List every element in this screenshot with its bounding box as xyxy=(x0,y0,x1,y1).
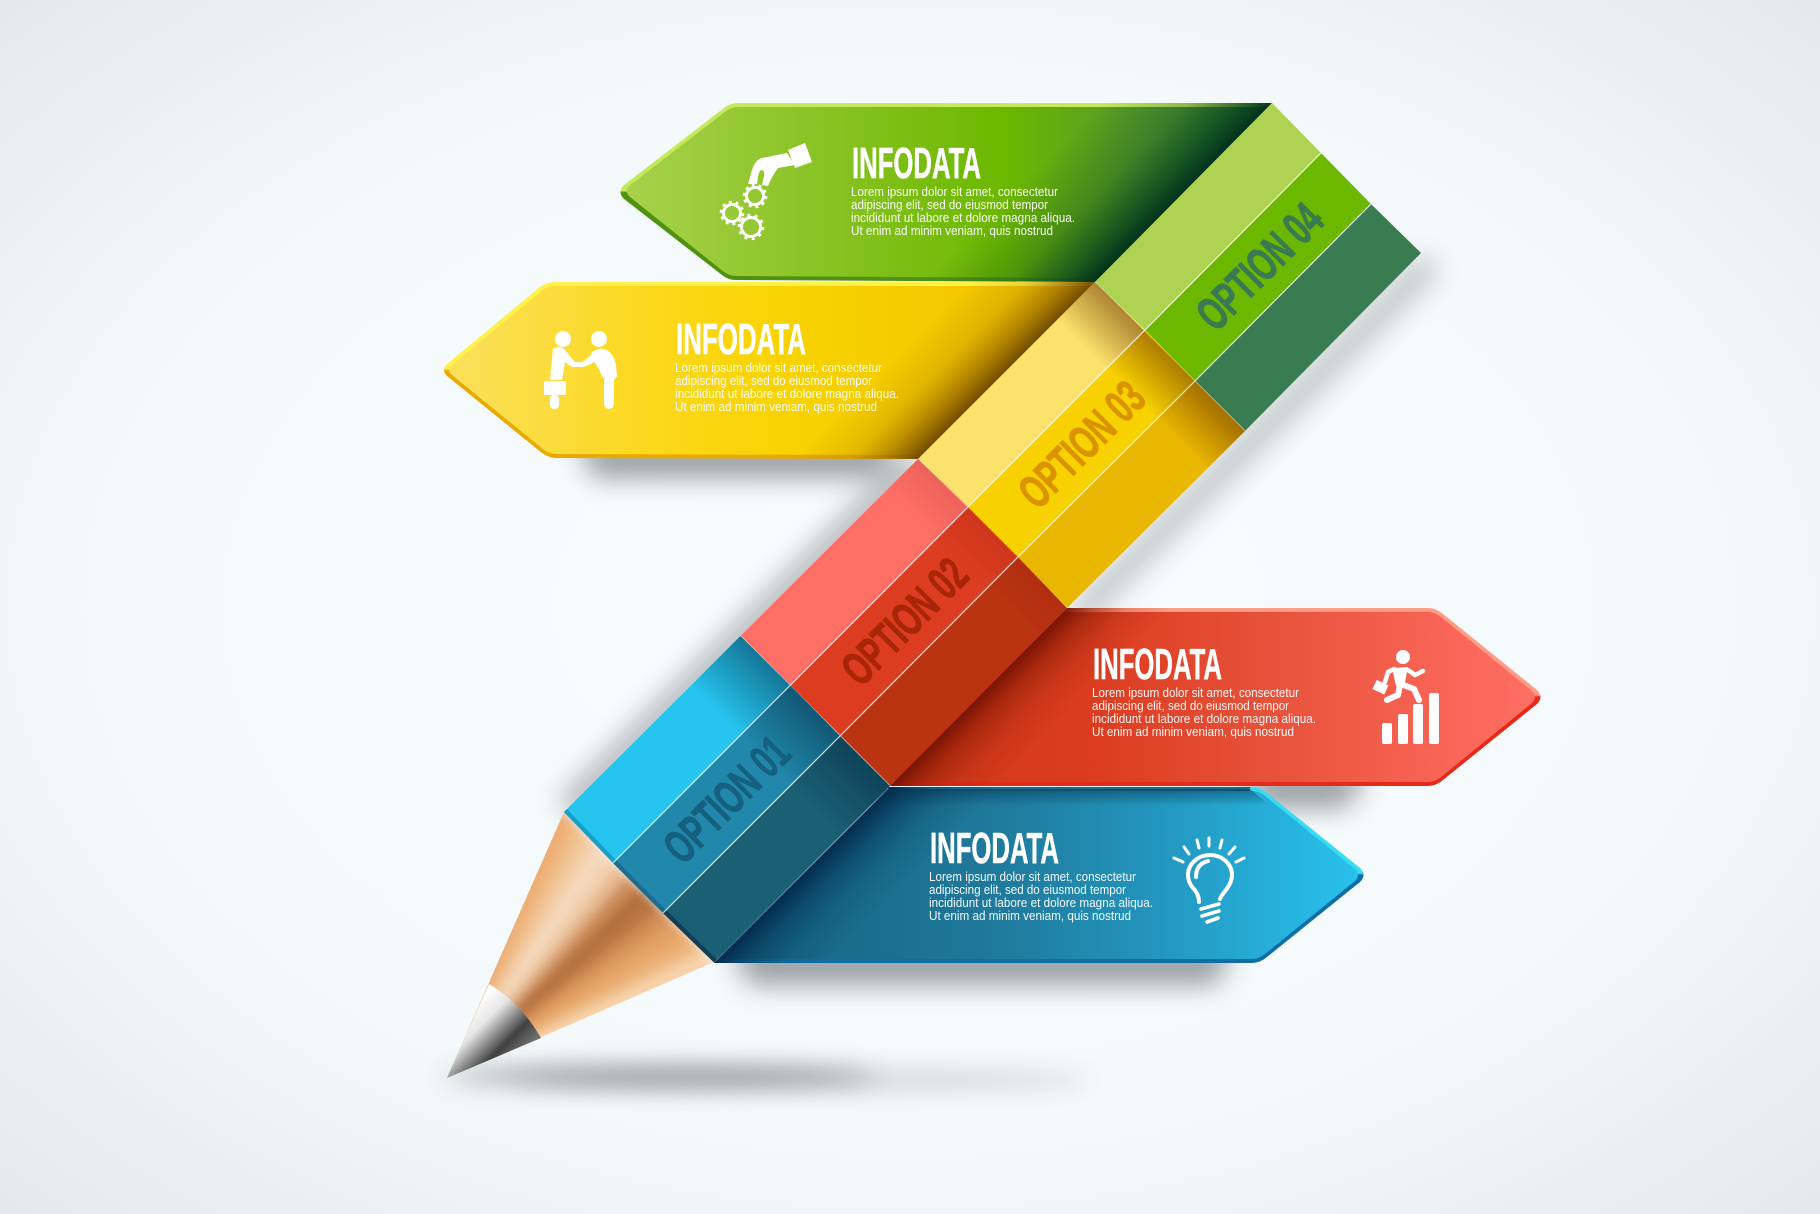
pencil body: option 04 segment xyxy=(1095,103,1421,431)
pencil body: option 02 segment xyxy=(740,459,1067,786)
heading: infodata green: INFODATA xyxy=(852,139,981,188)
text block: red description: Lorem ipsum dolor sit amet, consectetur xyxy=(1092,686,1299,700)
icon: runner on bars xyxy=(1372,650,1439,744)
pencil body: option 03 segment xyxy=(918,282,1245,608)
heading: infodata blue: INFODATA xyxy=(930,824,1059,873)
label: option 04: OPTION 04 xyxy=(1185,192,1333,340)
text block: red description: incididunt ut labore et dolore magna aliqua. xyxy=(1092,712,1316,726)
text block: green description: incididunt ut labore et dolore magna aliqua. xyxy=(851,211,1075,225)
text block: yellow description xyxy=(675,361,899,414)
text block: yellow description: adipiscing elit, sed do eiusmod tempor xyxy=(675,374,872,388)
icon: hand with gears xyxy=(721,143,812,239)
text block: green description: adipiscing elit, sed do eiusmod tempor xyxy=(851,198,1048,212)
heading: infodata yellow: INFODATA xyxy=(676,315,806,364)
text block: red description: Ut enim ad minim veniam, quis nostrud xyxy=(1092,725,1294,739)
text block: yellow description: Ut enim ad minim veniam, quis nostrud xyxy=(675,400,877,414)
text block: blue description: incididunt ut labore et dolore magna aliqua. xyxy=(929,896,1153,910)
pencil wood xyxy=(448,812,714,1076)
text block: yellow description: incididunt ut labore et dolore magna aliqua. xyxy=(675,387,899,401)
text block: red description xyxy=(1092,686,1316,739)
icon: handshake xyxy=(544,331,617,409)
label: option 01: OPTION 01 xyxy=(652,725,800,873)
text block: green description: Lorem ipsum dolor sit amet, consectetur xyxy=(851,185,1058,199)
text block: green description: Ut enim ad minim veniam, quis nostrud xyxy=(851,224,1053,238)
text block: blue description: Lorem ipsum dolor sit amet, consectetur xyxy=(929,870,1136,884)
drop shadows xyxy=(445,253,1440,1090)
icon: light bulb xyxy=(1174,838,1244,922)
text block: green description xyxy=(851,185,1075,238)
label: option 03: OPTION 03 xyxy=(1007,370,1155,518)
pencil lead xyxy=(447,984,541,1078)
pencil body: option 01 segment xyxy=(564,636,890,962)
text block: yellow description: Lorem ipsum dolor sit amet, consectetur xyxy=(675,361,882,375)
text block: red description: adipiscing elit, sed do eiusmod tempor xyxy=(1092,699,1289,713)
panel: option 04 info arrow (green) xyxy=(620,103,1272,282)
text block: blue description xyxy=(929,870,1153,923)
panel: option 01 info arrow (blue) xyxy=(714,787,1364,963)
text block: blue description: Ut enim ad minim veniam, quis nostrud xyxy=(929,909,1131,923)
panel: option 02 info arrow (red) xyxy=(890,608,1540,786)
heading: infodata red: INFODATA xyxy=(1093,640,1222,689)
text block: blue description: adipiscing elit, sed do eiusmod tempor xyxy=(929,883,1126,897)
label: option 02: OPTION 02 xyxy=(830,547,978,695)
panel: option 03 info arrow (yellow) xyxy=(444,282,1095,459)
